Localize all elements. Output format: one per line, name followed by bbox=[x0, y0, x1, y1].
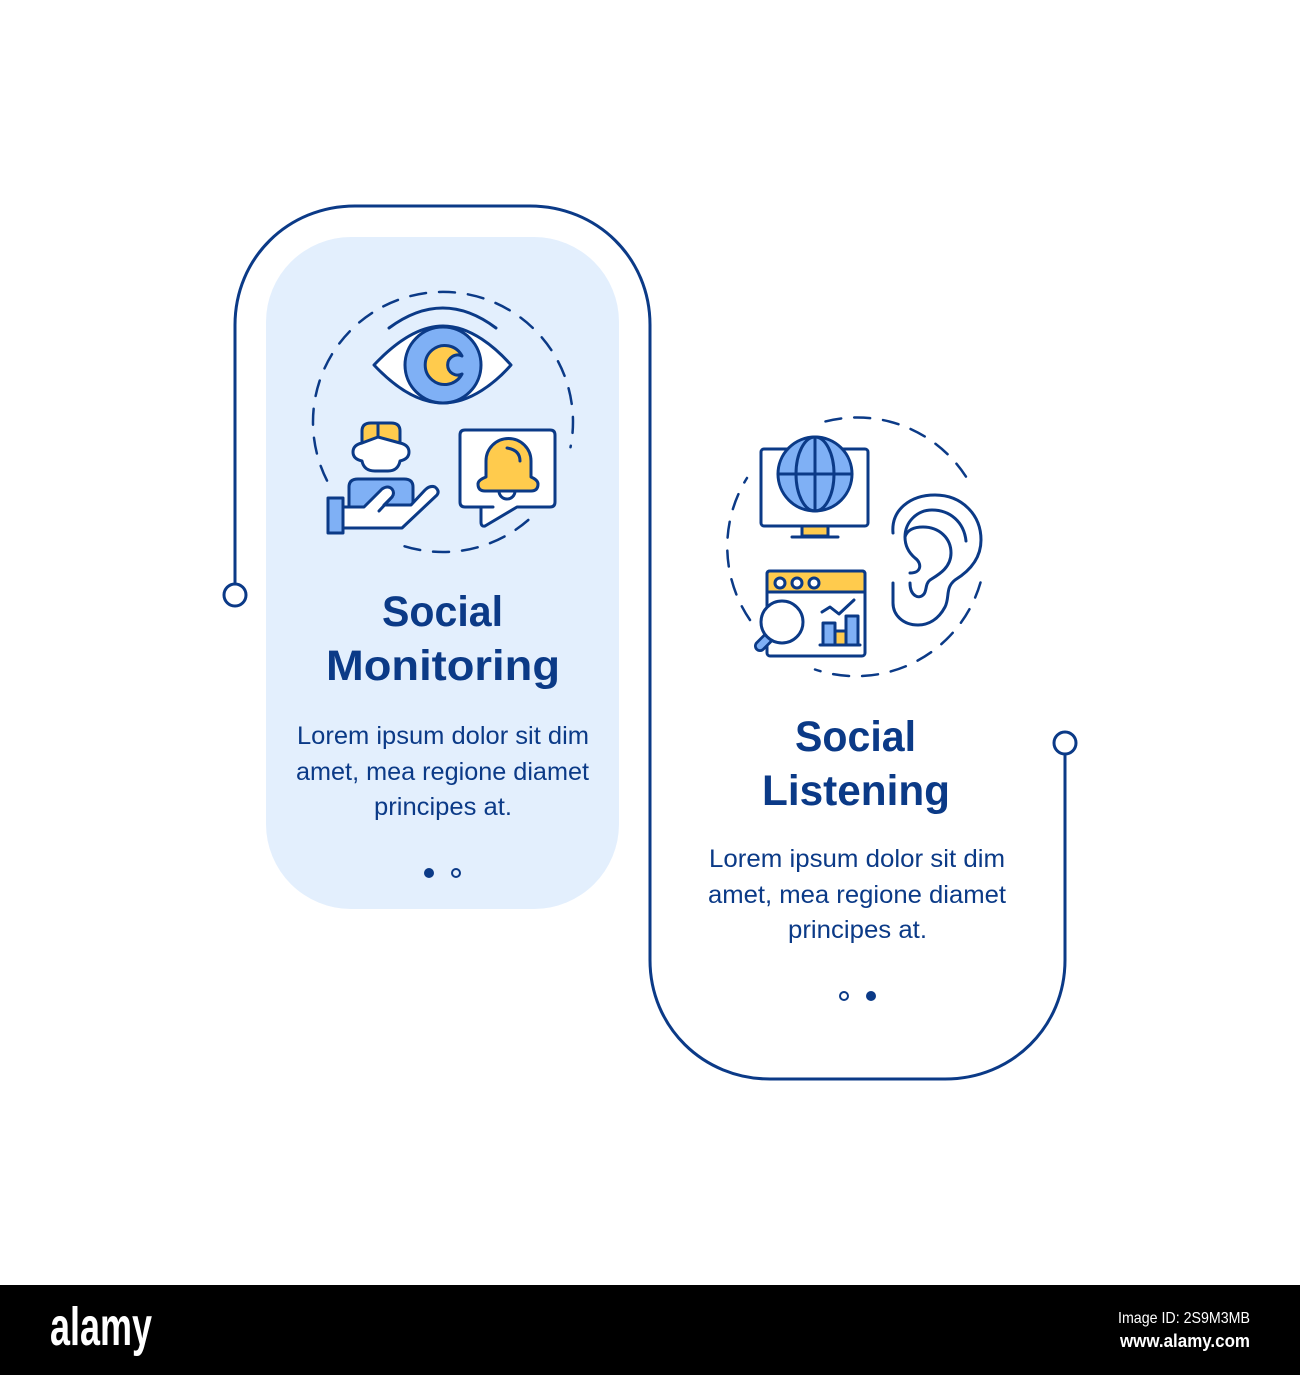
icon: dashed ring bbox=[313, 292, 573, 552]
icon: analytics browser window bbox=[760, 571, 865, 656]
icon: bell speech bubble bbox=[460, 430, 555, 526]
icon: globe on monitor bbox=[761, 437, 868, 537]
heading: social listening: Listening bbox=[762, 767, 950, 815]
text: social monitoring description: Lorem ipsum dolor sit dim bbox=[297, 722, 589, 750]
text: social listening description: Lorem ipsum dolor sit dim bbox=[709, 845, 1005, 873]
text: social listening description: amet, mea regione diamet bbox=[708, 881, 1006, 909]
heading: social listening: Social bbox=[795, 713, 916, 761]
icon: ear bbox=[893, 495, 981, 625]
heading: social monitoring: Social bbox=[382, 588, 503, 636]
pagination dots: panel one bbox=[424, 868, 460, 878]
connector outline bbox=[224, 206, 1076, 1079]
pagination dots: panel two bbox=[840, 991, 876, 1001]
text: social listening description bbox=[708, 845, 1006, 944]
icon: magnifier bbox=[760, 601, 803, 646]
footer: website: www.alamy.com bbox=[1119, 1331, 1250, 1351]
text: social listening description: principes at. bbox=[788, 916, 927, 944]
text: social monitoring description: amet, mea regione diamet bbox=[296, 758, 589, 786]
footer: alamy logo: alamy bbox=[50, 1297, 152, 1357]
icon: social listening illustration bbox=[727, 417, 981, 676]
text: social monitoring description: principes at. bbox=[374, 793, 512, 821]
heading: social monitoring: Monitoring bbox=[326, 642, 560, 690]
icon: person on hand bbox=[328, 423, 438, 533]
icon: social monitoring illustration bbox=[313, 292, 573, 552]
heading: social listening bbox=[762, 713, 950, 815]
heading: social monitoring bbox=[326, 588, 560, 690]
footer: image id: Image ID: 2S9M3MB bbox=[1118, 1310, 1250, 1327]
text: social monitoring description bbox=[296, 722, 589, 821]
icon: eye bbox=[374, 308, 511, 403]
icon: dashed ring bbox=[727, 417, 980, 676]
footer: watermark bar bbox=[0, 1285, 1300, 1375]
panel: social monitoring background bbox=[266, 237, 619, 909]
